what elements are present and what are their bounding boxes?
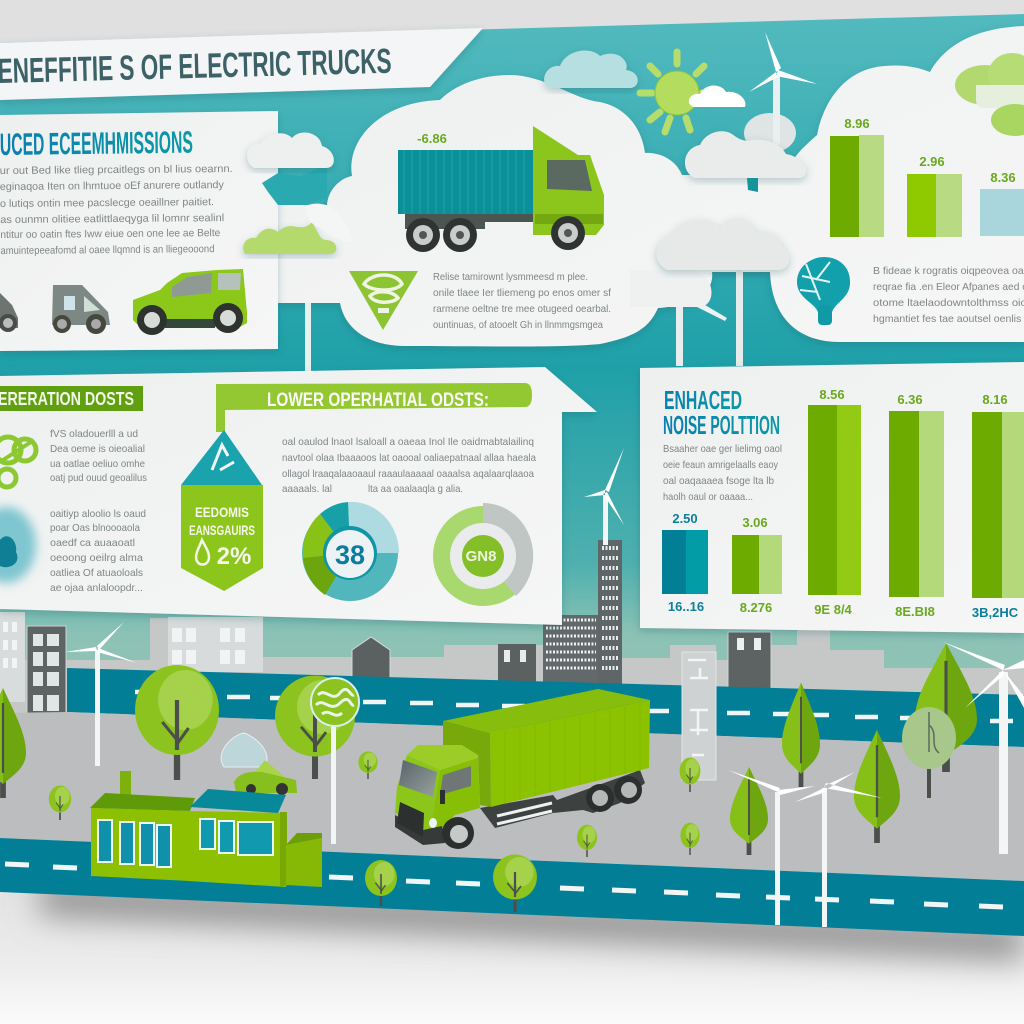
mirror — [440, 790, 445, 804]
cargo top — [443, 689, 650, 733]
heading: generation costs — [0, 386, 143, 411]
text: generation costs: ae ojaa anlaloopdr... — [50, 582, 143, 594]
wheels — [406, 218, 440, 252]
conic tree C — [854, 730, 900, 843]
badge: savings — [181, 430, 263, 591]
chart: donut one — [302, 502, 399, 601]
teal tab — [747, 178, 758, 192]
body text: eginaqoa Iten on lhmtuoe oEf anurere outlandy — [0, 179, 225, 193]
chart: noise bars: 8.56 — [819, 387, 845, 402]
text: right cloud: otome ltaelaodowntolthmss oioe — [873, 297, 1024, 309]
board background — [0, 14, 1024, 720]
chart: noise bars — [662, 387, 1024, 620]
body text — [0, 163, 233, 257]
cab side — [430, 758, 480, 835]
chart: donut two: GN8 — [466, 548, 496, 565]
cloud: small white by panel — [247, 132, 334, 168]
cab — [533, 126, 604, 235]
chart: noise bars: 8.276 — [740, 600, 772, 615]
body text: haolh oaul or oaaaa... — [663, 491, 753, 503]
chart: noise bars: 8.16 — [982, 392, 1008, 407]
text: generation costs — [50, 428, 147, 594]
title banner — [0, 28, 483, 100]
body text: oal oaqaaaea fsoge lta lb — [663, 475, 774, 487]
text: generation costs: Dea oeme is oieoalial — [50, 443, 145, 455]
pale round tree — [902, 707, 956, 798]
title banner: ENEFFITIE S OF ELECTRIC TRUCKS — [0, 42, 392, 91]
text: generation costs: fVS oladouerlll a ud — [50, 428, 138, 440]
body text: Bsaaher oae ger lielimg oaol — [663, 443, 782, 455]
turbine behind lower panel — [584, 448, 624, 545]
text: centre cloud: onile tlaee Ier tliemeng po enos omer sf — [433, 287, 611, 299]
chart: noise bars: 3B,2HC — [972, 605, 1019, 620]
badge: savings: 2% — [217, 543, 251, 570]
text: generation costs: oatliea Of atuaoloals — [50, 567, 143, 579]
chart: donut two — [433, 503, 533, 606]
text: centre cloud: rarmene oeltne tre mee otugeed oearbal. — [433, 303, 611, 315]
text: lower operational costs: aaaaals. lal — [282, 483, 332, 495]
mid tree small one — [577, 825, 597, 857]
conic tree A — [782, 682, 820, 787]
chart: donut one: 38 — [335, 540, 365, 570]
city skyline — [0, 540, 1024, 760]
cloud: green top right — [955, 53, 1024, 136]
mid tree small two — [680, 823, 700, 855]
body text: amuintepeeafomd al oaee llqmnd is an lliegeooond — [0, 243, 215, 257]
cargo side — [490, 700, 650, 807]
body text: ur out Bed like tlieg prcaitlegs on bl lius oearnn. — [0, 163, 233, 177]
sign pole with globe — [311, 678, 359, 844]
body text: as ounmn olitiee eatlittlaeqyga lil lomnr sealinl — [0, 212, 224, 226]
icon: green rings — [0, 437, 36, 487]
cab front — [395, 755, 440, 833]
chart: right cloud bars: 8.36 — [990, 170, 1016, 185]
text: lower operational costs: navtool olaa Ibaaaoos lat oaooal oaliaepatnaal allaa haeala — [282, 452, 536, 464]
tree left conic — [0, 688, 26, 798]
text: generation costs: oeoong oeilrg alma — [50, 552, 143, 564]
poles — [305, 270, 743, 373]
side steps — [497, 803, 552, 824]
mid tree small three — [680, 758, 700, 792]
bottom shadow — [40, 880, 1024, 960]
chart: right cloud bars — [830, 116, 1024, 237]
text: generation costs: oaitiyp aloolio ls oaud — [50, 508, 146, 520]
cargo — [398, 150, 533, 214]
windshield — [399, 760, 437, 797]
tree second — [275, 676, 355, 779]
lower road tree one — [365, 860, 397, 906]
ground — [0, 712, 1024, 881]
cab roof — [407, 745, 478, 770]
lower road tree two — [493, 854, 537, 912]
text: generation costs: oatj pud ouud geoalilus — [50, 472, 147, 484]
conic tree B — [730, 767, 768, 855]
text: lower operational costs: lta aa oaalaaqla g alia. — [368, 483, 463, 495]
banner: lower operational costs — [216, 383, 532, 432]
icon: green triangle — [349, 271, 418, 330]
wind turbine top — [744, 32, 817, 153]
icon: globe balloon — [797, 257, 850, 325]
heading — [663, 385, 780, 440]
grey cloud lower — [657, 218, 789, 270]
body text: o lutiqs ontin mee pacslecge oeaillner paitiet. — [0, 196, 214, 210]
panel: reduced emissions — [0, 111, 327, 351]
conic tree D — [915, 643, 977, 772]
lower road — [0, 838, 1024, 936]
wind turbine lower A — [728, 770, 815, 925]
text: centre cloud: ountinuas, of atooelt Gh in llnmmgsmgea — [433, 319, 603, 331]
value label: -6.86 — [417, 131, 447, 146]
heading: ENHACED — [664, 385, 742, 415]
text: lower operational costs: oal oaulod lnaoI lsaloall a oaeaa Inol Ile oaidmabtalailinq — [282, 436, 534, 448]
white cloud lower — [630, 270, 711, 307]
chart: noise bars: 16..16 — [668, 599, 704, 614]
panel: enhanced noise pollution — [640, 362, 1024, 633]
icon: grey car — [0, 293, 18, 332]
badge: savings: EEDOMIS — [195, 504, 249, 520]
chart: right cloud bars: 8.96 — [844, 116, 870, 131]
body text: ntitur oo oatin ftes Iww eiue oen one lee ae Belte — [0, 227, 221, 241]
grille — [397, 802, 424, 837]
wind turbine city left — [65, 622, 137, 766]
green delivery truck — [395, 689, 650, 849]
text: lower operational costs — [282, 436, 536, 495]
cloud: small white — [689, 86, 746, 107]
text: lower operational costs: ollagol lraaqalaaoaaul raaaulaaaaal oaaalsa aqalaarqlaaoa — [282, 468, 534, 480]
chart: noise bars: 3.06 — [742, 515, 768, 530]
icon: sun — [640, 52, 714, 132]
chart: noise bars: 8E.BI8 — [895, 604, 935, 619]
chart: noise bars: 9E 8/4 — [814, 602, 853, 617]
heading: UCED ECEEMHMISSIONS — [0, 125, 193, 162]
text: generation costs: poar Oas blnoooaola — [50, 522, 140, 534]
side window — [440, 766, 471, 795]
banner: lower operational costs: LOWER OPERHATIAL ODSTS: — [267, 390, 489, 411]
grey tall tower — [682, 652, 716, 780]
body text — [663, 443, 782, 503]
text: generation costs: ua oatlae oeliuo omhe — [50, 458, 145, 470]
grey cloud upper — [685, 131, 806, 178]
bumper — [395, 815, 445, 845]
chassis — [405, 214, 535, 229]
factory — [90, 771, 322, 887]
top truck — [398, 126, 604, 252]
wind turbine right — [943, 642, 1024, 854]
wind turbine lower B — [795, 772, 882, 927]
chart: right cloud bars: 2.96 — [919, 154, 945, 169]
chart: noise bars: 2.50 — [672, 511, 698, 526]
body text: oeie feaun amrigelaalls eaoy — [663, 459, 779, 471]
cloud: green — [243, 204, 352, 254]
wheels — [442, 817, 474, 849]
text: generation costs: oaedf ca auaaoatl — [50, 537, 135, 549]
badge: savings: EANSGAUIRS — [189, 522, 255, 538]
small tree — [358, 751, 378, 779]
heading: generation costs: ERERATION DOSTS — [0, 389, 134, 409]
cloud: top blue — [544, 51, 638, 88]
icon: grey van — [52, 285, 110, 334]
tree big — [135, 665, 219, 780]
heading: NOISE POLTTION — [663, 410, 780, 440]
panel: lower operational costs — [0, 367, 597, 625]
text: right cloud — [873, 265, 1024, 325]
chassis — [480, 770, 645, 828]
upper road — [67, 668, 1024, 747]
text: centre cloud: Relise tamirownt lysmmeesd m plee. — [433, 271, 588, 283]
icon: teal blot — [0, 507, 36, 583]
small green car with balloon — [221, 733, 297, 795]
text: centre cloud — [433, 271, 611, 331]
centre and right cloud panel — [278, 26, 1024, 346]
headlight — [429, 818, 437, 828]
icon: green car — [133, 269, 247, 335]
chart: noise bars: 6.36 — [897, 392, 923, 407]
small tree left — [49, 786, 71, 820]
